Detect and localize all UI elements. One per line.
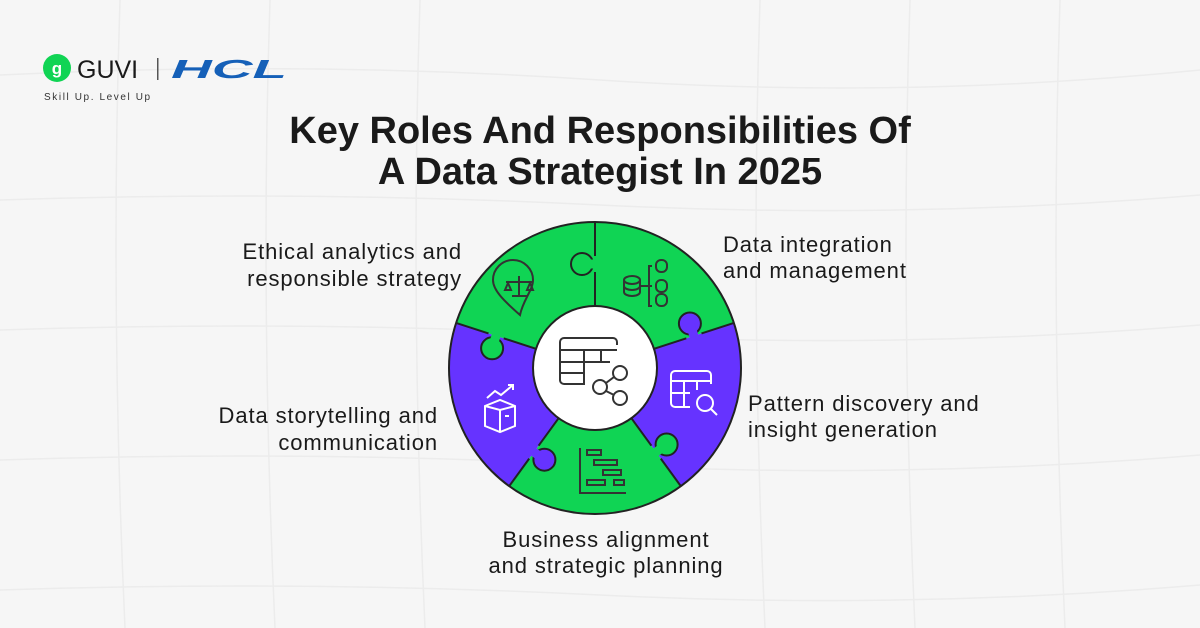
label: integration: Data integration [723, 232, 893, 257]
labels: responsible strategy [247, 266, 462, 291]
logo: GUVI [77, 56, 138, 84]
title: A Data Strategist In 2025 [378, 151, 822, 193]
icon: scales [493, 260, 533, 315]
icon: databases [624, 260, 667, 306]
title: Key Roles And Responsibilities Of [289, 110, 911, 152]
puzzle wheel [449, 222, 741, 514]
labels [219, 232, 980, 578]
logo: g [52, 59, 62, 78]
icon: center table share [560, 338, 627, 405]
logo [43, 54, 287, 103]
label: pattern: Pattern discovery and [748, 391, 980, 416]
label: business: Business alignment [503, 527, 709, 552]
logo: Skill Up. Level Up [44, 92, 152, 103]
labels: insight generation [748, 417, 938, 442]
label: ethical: Ethical analytics and [243, 239, 462, 264]
labels: and strategic planning [488, 553, 724, 578]
labels: and management [723, 258, 907, 283]
label: storytelling: Data storytelling and [219, 403, 438, 428]
labels: communication [278, 430, 438, 455]
logo: HCL [171, 54, 287, 84]
icon: table search [671, 371, 717, 415]
title [289, 110, 911, 193]
icon: gantt chart [580, 448, 626, 493]
icon: box with trend [485, 385, 515, 432]
